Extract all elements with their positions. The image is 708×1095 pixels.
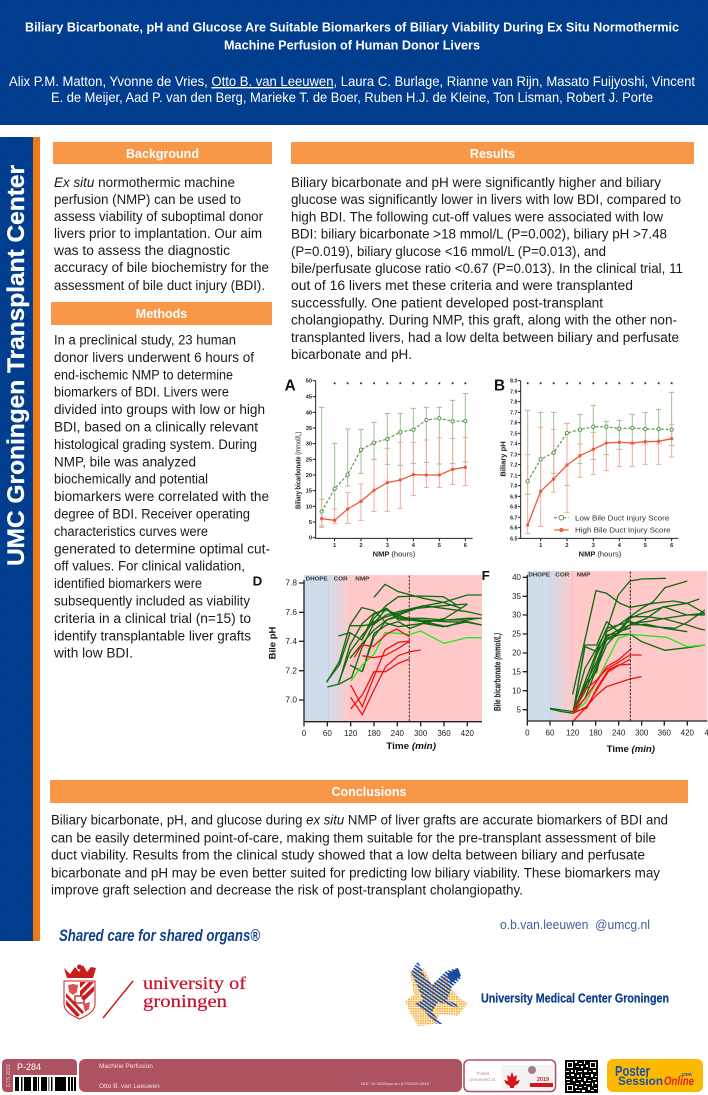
text: conclusions: duct viability. Results from the clinical study showed that a low delta between biliary and perfusate [51, 848, 645, 862]
chart A: biliary bicarbonate: 4 [412, 543, 416, 549]
chart F: bile bicarbonate over time: 360 [658, 728, 672, 737]
chart D: bile pH over time: 7.2 [285, 665, 297, 675]
chart D: bile pH over time: 240 [391, 729, 405, 738]
chart B: biliary pH: * [539, 382, 542, 389]
logo: university of groningen [64, 964, 246, 1019]
chart A: biliary bicarbonate: * [360, 382, 363, 389]
text: methods: with low BDI. [53, 646, 133, 661]
text: methods: characteristics curves were [54, 524, 208, 539]
chart B: biliary pH: NMP (hours) [579, 551, 621, 558]
chart A: biliary bicarbonate: Biliary bicarbonate (mmol/L) [296, 432, 303, 509]
authors [9, 73, 695, 105]
footer: session info: Machine Perfusion [99, 1063, 153, 1070]
heading: results: Results [470, 147, 515, 161]
chart D: bile pH over time: DHOPE [306, 577, 328, 583]
chart A: biliary bicarbonate: * [333, 382, 336, 389]
chart D: bile pH over time: NMP [355, 577, 370, 583]
text: methods: donor livers underwent 6 hours of [54, 350, 254, 365]
text: results: glucose was significantly lower in livers with low BDI, compared to [291, 192, 681, 207]
footer: session info: DOI: 10.3252/pso.eu.ILTS2019.2019 [361, 1081, 429, 1086]
icon: frog [405, 961, 468, 1026]
text: results: Biliary bicarbonate and pH were significantly higher and biliary [291, 175, 661, 190]
footer: PosterSessionOnline logo: Online [664, 1076, 695, 1088]
logo: university of groningen: university of [143, 973, 246, 993]
footer: poster id: P-284 [17, 1062, 41, 1072]
chart B: biliary pH: 6.6 [510, 526, 517, 532]
chart D: bile pH over time: 7.4 [285, 636, 297, 646]
text: methods: identified biomarkers were [54, 576, 202, 591]
chart B: biliary pH: 6.7 [510, 515, 517, 521]
text: conclusions [51, 812, 668, 898]
heading: methods [51, 302, 272, 325]
footer: poster presented at: presented at: [470, 1077, 496, 1082]
chart A: biliary bicarbonate: 5 [438, 543, 441, 549]
chart A: biliary bicarbonate: 40 [306, 410, 312, 416]
chart D: bile pH over time: 0 [302, 729, 307, 738]
text: methods: In a preclinical study, 23 human [54, 332, 236, 348]
chart A: biliary bicarbonate: * [451, 382, 454, 389]
chart D: bile pH over time: 7.6 [285, 607, 297, 617]
chart F: bile bicarbonate over time: 0 [525, 728, 530, 737]
chart D: bile pH over time: 60 [323, 729, 332, 738]
header banner [0, 0, 708, 125]
title: Biliary Bicarbonate, pH and Glucose Are Suitable Biomarkers of Biliary Viability During Ex Situ Normothermic [25, 20, 679, 34]
text: methods: NMP, bile was analyzed [54, 454, 196, 469]
chart A: biliary bicarbonate: 50 [306, 379, 312, 385]
chart F: bile bicarbonate over time [482, 568, 708, 754]
footer: poster presented at: Poster [476, 1071, 490, 1076]
text: background: perfusion (NMP) can be used to [54, 192, 241, 207]
chart B: biliary pH: * [618, 382, 621, 389]
legend: High Bile Duct Injury Score [575, 526, 671, 535]
text: background: assess viability of suboptimal donor [54, 209, 263, 224]
chart F: bile bicarbonate over time: COR [555, 573, 569, 579]
chart F: bile bicarbonate over time: NMP [577, 573, 591, 579]
footer: PosterSessionOnline logo: Poster [615, 1063, 650, 1080]
text: results: (P=0.019), biliary glucose <16 mmol/L (P=0.013), and [291, 244, 606, 259]
chart F: bile bicarbonate over time: 5 [517, 705, 522, 714]
slogan: Shared care for shared organs® [59, 927, 261, 945]
chart A: biliary bicarbonate: 1 [333, 543, 336, 549]
text: background: was to assess the diagnostic [53, 243, 230, 258]
text: results: bile/perfusate glucose ratio <0.67 (P=0.013). In the clinical trial, 11 [291, 261, 683, 276]
chart F: bile bicarbonate over time: Time (min) [607, 744, 655, 754]
heading: background: Background [126, 147, 199, 161]
heading: results [291, 142, 694, 164]
text: methods: generated to determine optimal cut- [54, 541, 270, 556]
footer: poster presented at: 2019 [537, 1077, 549, 1083]
logo: university of groningen: groningen [143, 991, 227, 1011]
text: background: assessment of bile duct injury (BDI). [54, 278, 265, 293]
chart B: biliary pH: 5 [644, 543, 647, 549]
chart A: biliary bicarbonate: 25 [306, 457, 312, 463]
chart F: bile bicarbonate over time: DHOPE [528, 573, 550, 579]
chart B: biliary pH: 7.0 [510, 484, 517, 490]
chart D: bile pH over time: COR [334, 577, 348, 583]
text: methods: off values. For clinical validation, [54, 559, 245, 574]
chart A: biliary bicarbonate: NMP (hours) [373, 551, 415, 558]
chart A: biliary bicarbonate: 2 [359, 543, 363, 549]
chart B: biliary pH: 7.2 [510, 463, 517, 469]
chart F: bile bicarbonate over time: 20 [512, 649, 522, 658]
chart B: biliary pH: B [494, 378, 505, 395]
chart B: biliary pH: * [605, 382, 608, 389]
text: methods [53, 332, 270, 661]
footer: poster id [2, 1059, 77, 1092]
chart A: biliary bicarbonate: * [399, 382, 402, 389]
heading: conclusions: Conclusions [331, 785, 407, 799]
chart F: bile bicarbonate over time: 120 [566, 728, 580, 737]
chart F: bile bicarbonate over time: 180 [589, 728, 603, 737]
text: conclusions: can be easily determined point-of-care, making them suitable for the pre-transplant assessment of bile [51, 830, 656, 846]
heading: conclusions [50, 780, 688, 803]
chart A: biliary bicarbonate: 15 [306, 489, 312, 495]
chart F: bile bicarbonate over time: 25 [512, 630, 522, 639]
text: background: Ex situ normothermic machine [54, 175, 235, 190]
chart D: bile pH over time: 7.0 [285, 695, 297, 705]
chart D: bile pH over time: D [253, 574, 263, 589]
sidebar: UMC Groningen Transplant Center [0, 137, 40, 941]
chart B: biliary pH: 7.4 [510, 442, 517, 448]
text: methods: BDI, based on a clinically relevant [54, 420, 258, 434]
chart B: biliary pH [494, 378, 678, 558]
text: methods: divided into groups with low or high [54, 402, 265, 417]
chart A: biliary bicarbonate [285, 378, 473, 558]
chart F: bile bicarbonate over time: 10 [512, 686, 522, 695]
chart F: bile bicarbonate over time: 60 [546, 728, 555, 737]
text: results: successfully. One patient developed post-transplant [291, 295, 603, 310]
footer: session info: Otto B. van Leeuwen [99, 1083, 160, 1090]
text: methods: biochemically and potential [54, 472, 208, 487]
logo: UMCG: University Medical Center Groningen [481, 992, 669, 1006]
footer: PosterSessionOnline logo [607, 1059, 703, 1092]
footer: session info [79, 1059, 462, 1092]
text: results: high BDI. The following cut-off values were associated with low [291, 209, 663, 224]
panel: background [53, 142, 272, 293]
text: methods: biomarkers of BDI. Livers were [54, 385, 229, 400]
chart B: biliary pH: * [670, 382, 673, 389]
sidebar: UMC Groningen Transplant Center: UMC Groningen Transplant Center [3, 165, 30, 566]
chart F: bile bicarbonate over time: F [482, 568, 490, 583]
chart B: biliary pH: 3 [592, 543, 595, 549]
text: results: transplanted livers, had a low delta between biliary and perfusate [291, 330, 679, 345]
chart B: biliary pH: 2 [565, 543, 569, 549]
chart B: biliary pH: 6.5 [510, 536, 517, 542]
chart B: biliary pH: * [631, 382, 634, 389]
authors: Alix P.M. Matton, Yvonne de Vries, Otto B. van Leeuwen, Laura C. Burlage, Rianne van Rijn, Masato Fuijyoshi, Vincent [9, 73, 695, 89]
barcode [15, 1077, 76, 1091]
logo: UMCG [405, 961, 669, 1026]
chart B: biliary pH: 7.3 [510, 452, 517, 458]
chart A: biliary bicarbonate: 30 [306, 442, 312, 448]
chart A: biliary bicarbonate: * [464, 382, 467, 389]
chart B: biliary pH: Biliary pH [501, 441, 508, 477]
icon: maple leaf [504, 1072, 520, 1088]
chart B: biliary pH: 7.6 [510, 421, 517, 427]
chart B: biliary pH: 1 [539, 543, 542, 549]
panel: conclusions [50, 780, 688, 898]
chart D: bile pH over time: 360 [437, 729, 451, 738]
chart D: bile pH over time [253, 574, 482, 751]
chart F: bile bicarbonate over time: 240 [612, 728, 626, 737]
chart B: biliary pH: 8.0 [510, 379, 517, 385]
text: conclusions: bicarbonate and pH may be even better suited for predicting low biliary viability. These biomarkers may [51, 866, 660, 880]
authors: E. de Meijer, Aad P. van den Berg, Marieke T. de Boer, Ruben H.J. de Kleine, Ton Lisman, Robert J. Porte [51, 89, 653, 105]
chart A: biliary bicarbonate: * [438, 382, 441, 389]
chart B: biliary pH: 7.8 [510, 400, 517, 406]
chart A: biliary bicarbonate: * [373, 382, 376, 389]
text: background: livers prior to implantation. Our aim [54, 226, 262, 241]
chart B: biliary pH: 6.8 [510, 505, 517, 511]
text: methods: criteria in a clinical trial (n=15) to [54, 611, 251, 626]
text: methods: end-ischemic NMP to determine [54, 367, 233, 382]
chart B: biliary pH: * [566, 382, 569, 389]
chart F: bile bicarbonate over time: 40 [512, 573, 522, 582]
chart A: biliary bicarbonate: * [425, 382, 428, 389]
chart F: bile bicarbonate over time: 30 [512, 611, 522, 620]
heading: background [53, 142, 272, 164]
chart B: biliary pH: 6.9 [510, 494, 517, 500]
chart D: bile pH over time: 300 [414, 729, 428, 738]
chart A: biliary bicarbonate: * [346, 382, 349, 389]
text: results [291, 175, 683, 362]
chart D: bile pH over time: 420 [461, 729, 475, 738]
chart F: bile bicarbonate over time: Bile bicarbonate (mmol/L) [493, 633, 503, 711]
chart B: biliary pH: 7.1 [510, 473, 517, 479]
chart B: biliary pH: * [526, 382, 529, 389]
text: methods: histological grading system. During [54, 437, 257, 452]
panel: methods [51, 302, 272, 661]
chart D: bile pH over time: 7.8 [285, 578, 297, 588]
chart A: biliary bicarbonate: 6 [464, 543, 467, 549]
chart A: biliary bicarbonate: * [412, 382, 415, 389]
chart D: bile pH over time: 180 [367, 729, 381, 738]
icon: crest [64, 964, 96, 1019]
chart D: bile pH over time: Time (min) [386, 741, 436, 751]
text: results: bicarbonate and pH. [291, 347, 412, 362]
chart A: biliary bicarbonate: 0 [309, 536, 312, 542]
chart D: bile pH over time: Bile pH [267, 627, 277, 659]
chart B: biliary pH: 4 [618, 543, 622, 549]
text: conclusions: improve graft selection and decrease the risk of post-transplant cholangiopathy. [51, 882, 523, 898]
chart A: biliary bicarbonate: 3 [386, 543, 389, 549]
text: background: accuracy of bile biochemistry for the [54, 260, 269, 275]
chart F: bile bicarbonate over time: 35 [512, 592, 522, 601]
text: methods: identify transplantable liver grafts [54, 628, 251, 643]
footer: QR code [565, 1060, 598, 1093]
chart A: biliary bicarbonate: * [386, 382, 389, 389]
chart B: biliary pH: * [644, 382, 647, 389]
text: methods: biomarkers were correlated with the [54, 489, 269, 504]
title: Machine Perfusion of Human Donor Livers [224, 38, 480, 52]
chart B: biliary pH: * [657, 382, 660, 389]
footer: PosterSessionOnline logo: .com [680, 1072, 692, 1078]
text: results: cholangiopathy. During NMP, this graft, along with the other non- [291, 313, 677, 328]
contact email: o.b.van.leeuwen @umcg.nl [500, 917, 650, 932]
chart A: biliary bicarbonate: A [285, 378, 296, 395]
chart A: biliary bicarbonate: 5 [309, 520, 312, 526]
chart A: biliary bicarbonate: 45 [306, 395, 312, 401]
legend [554, 513, 671, 535]
chart B: biliary pH: 7.9 [510, 389, 517, 395]
chart B: biliary pH: 7.5 [510, 431, 517, 437]
footer: poster presented at [464, 1060, 556, 1092]
legend: Low Bile Duct Injury Score [575, 513, 669, 522]
text: methods: degree of BDI. Receiver operating [54, 506, 250, 522]
text: conclusions: Biliary bicarbonate, pH, and glucose during ex situ NMP of liver grafts are accurate biomarkers of BDI and [51, 812, 668, 828]
chart B: biliary pH: * [579, 382, 582, 389]
chart F: bile bicarbonate over time: 300 [635, 728, 649, 737]
chart A: biliary bicarbonate: 10 [306, 504, 312, 510]
chart B: biliary pH: * [592, 382, 595, 389]
text: results: BDI: biliary bicarbonate >18 mmol/L (P=0.002), biliary pH >7.48 [291, 227, 667, 242]
chart B: biliary pH: 7.7 [510, 410, 517, 416]
text: results: out of 16 livers met these criteria and were transplanted [291, 278, 633, 293]
chart A: biliary bicarbonate: 20 [306, 473, 312, 479]
title [25, 20, 679, 52]
chart B: biliary pH: * [552, 382, 555, 389]
chart F: bile bicarbonate over time: 15 [512, 667, 522, 676]
text: methods: subsequently included as viability [54, 594, 250, 608]
panel: results [291, 142, 694, 362]
footer: PosterSessionOnline logo: Session [618, 1076, 663, 1088]
chart B: biliary pH: 6 [670, 543, 673, 549]
chart A: biliary bicarbonate: 35 [306, 426, 312, 432]
heading: methods: Methods [136, 307, 187, 321]
footer: poster id: ILTS 2019 [6, 1064, 12, 1087]
text: background [53, 175, 269, 293]
chart D: bile pH over time: 120 [344, 729, 358, 738]
chart F: bile bicarbonate over time: 420 [681, 728, 695, 737]
